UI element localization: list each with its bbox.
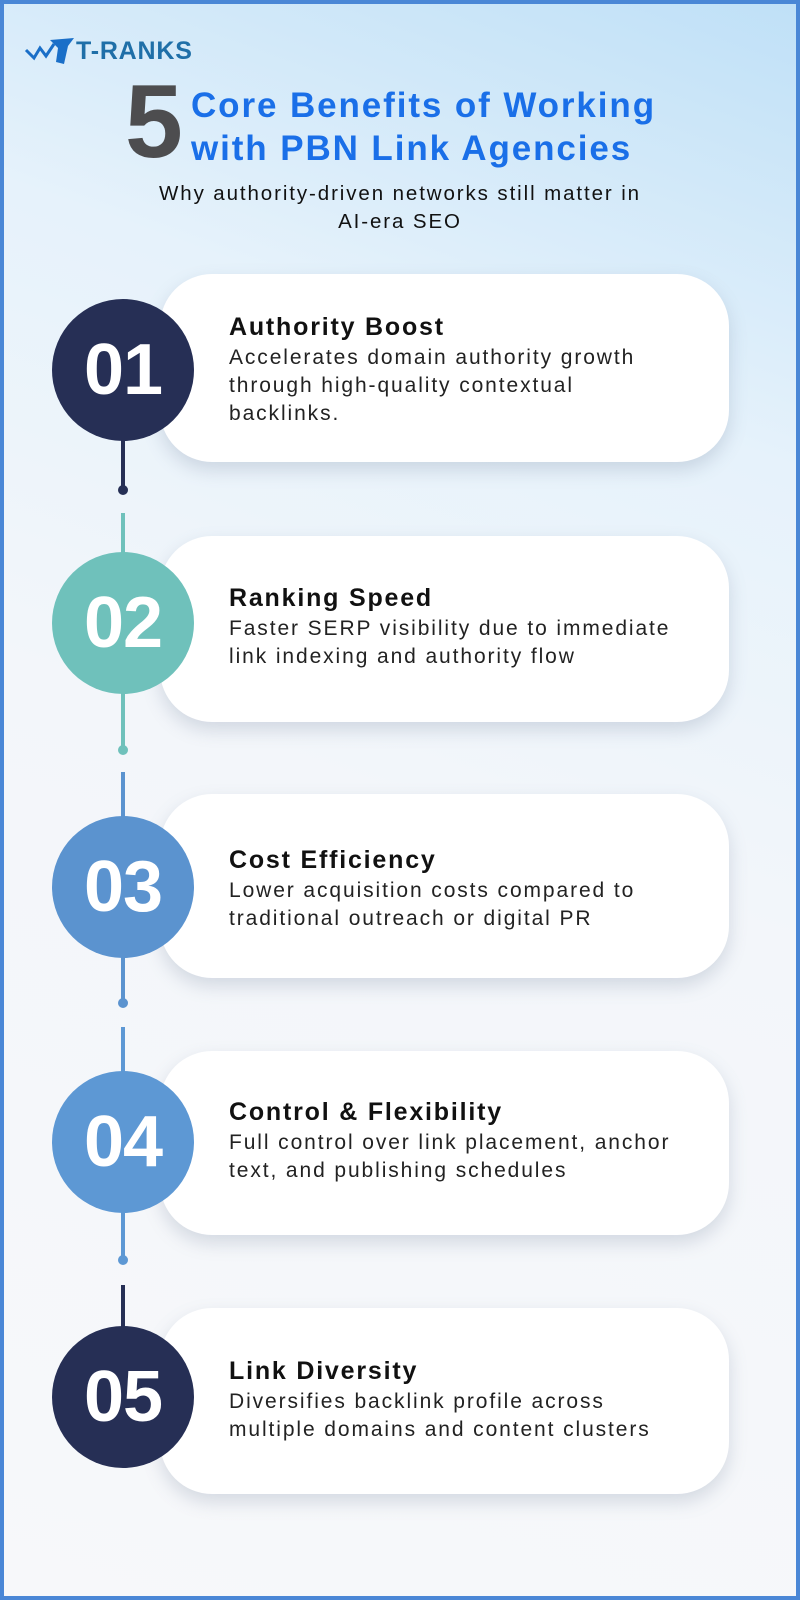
logo [25,37,193,65]
title: 5 [125,64,183,180]
text: Link Diversity [229,1357,418,1385]
panel: 05 [52,1308,736,1508]
connectors [118,440,128,1326]
subtitle: AI-era SEO [338,210,462,233]
text: link indexing and authority flow [229,645,576,668]
text: Ranking Speed [229,584,433,612]
text: 03 [84,847,162,927]
subtitle: Why authority-driven networks still matter in [159,182,641,205]
logo: T-RANKS [76,37,193,65]
title: Core Benefits of Working [191,86,656,125]
text: 05 [84,1357,162,1437]
panel: 03 [52,794,736,992]
text: 04 [84,1102,162,1182]
text: text, and publishing schedules [229,1159,567,1182]
title [125,64,656,180]
text: Diversifies backlink profile across [229,1390,605,1413]
text: Lower acquisition costs compared to [229,879,635,902]
text: 01 [84,330,162,410]
text: Accelerates domain authority growth [229,346,635,369]
subtitle [159,182,641,233]
text: Authority Boost [229,313,445,341]
panel: 01 [52,274,734,476]
text: Full control over link placement, anchor [229,1131,670,1154]
text: backlinks. [229,402,340,425]
panel: 04 [52,1051,736,1250]
title: with PBN Link Agencies [191,129,632,168]
text: traditional outreach or digital PR [229,907,592,930]
text: through high-quality contextual [229,374,574,397]
text: Control & Flexibility [229,1098,503,1126]
text: Cost Efficiency [229,846,437,874]
text: Faster SERP visibility due to immediate [229,617,670,640]
text: 02 [84,583,162,663]
text: multiple domains and content clusters [229,1418,651,1441]
panel: 02 [52,536,735,736]
